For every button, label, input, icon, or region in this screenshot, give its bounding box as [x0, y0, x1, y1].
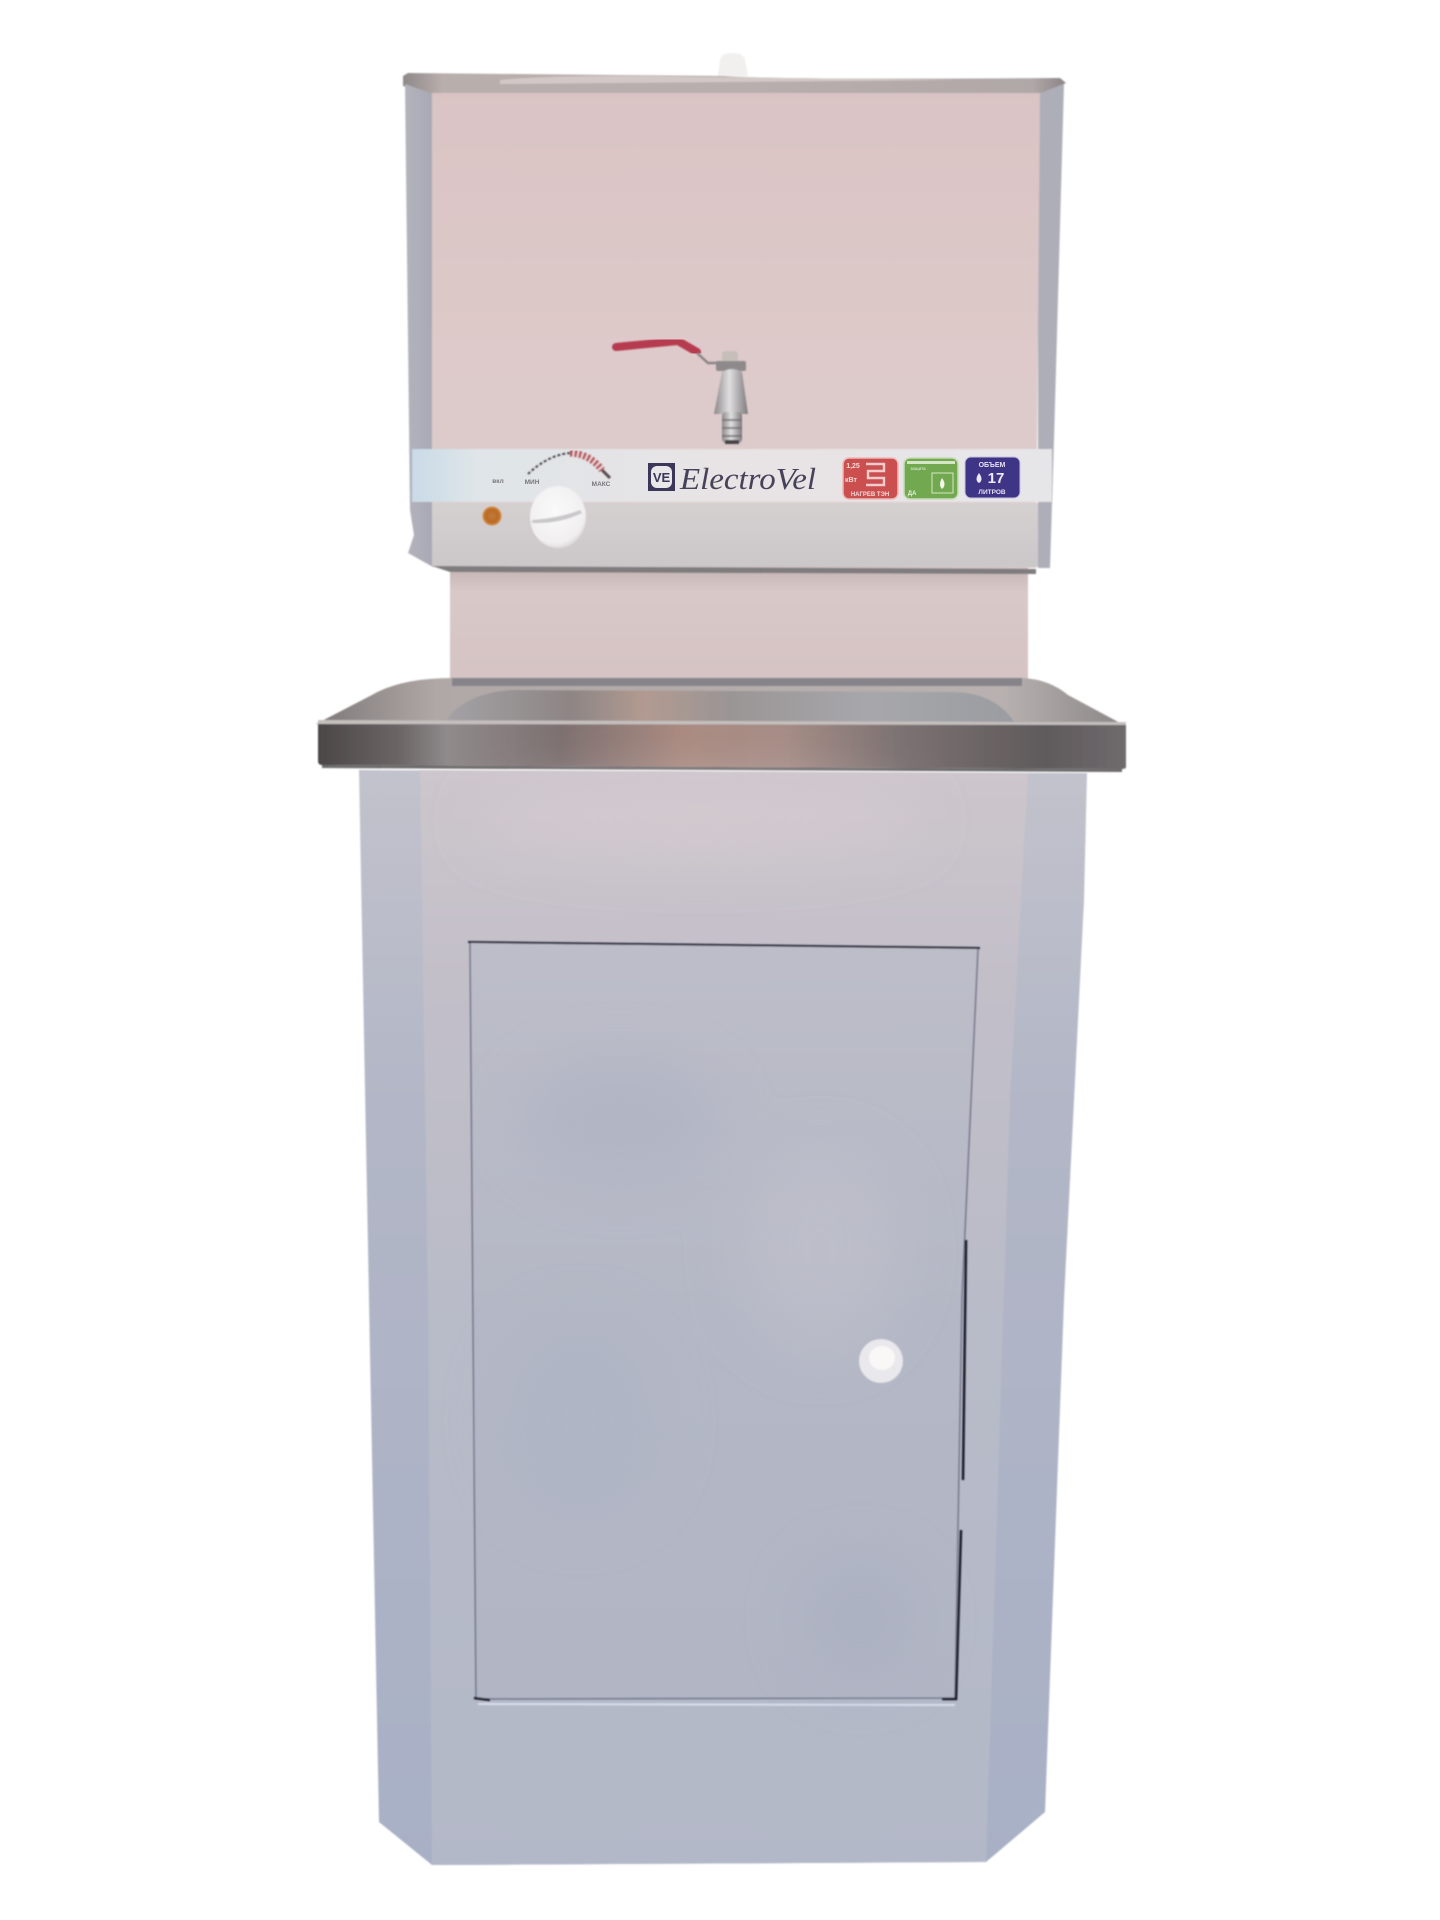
tank right side	[1038, 84, 1064, 568]
badge: safety	[904, 458, 958, 499]
rear splash panel	[450, 560, 1028, 685]
badge: volume 17 litres	[965, 457, 1020, 498]
scale labels	[492, 478, 611, 488]
sink bowl	[445, 690, 1014, 722]
door right gap	[956, 1240, 966, 1700]
indicator lamp	[482, 506, 502, 526]
door panel	[470, 942, 978, 1699]
cabinet front face	[420, 770, 1028, 1865]
red valve handle	[616, 341, 697, 352]
badge: volume 17 litres: 17	[988, 470, 1004, 487]
tap	[697, 351, 748, 444]
temperature scale arc	[528, 453, 610, 478]
brand name: ElectroVel	[679, 461, 816, 496]
badge: safety: защита	[910, 466, 926, 471]
cabinet door	[468, 942, 980, 1706]
badge: power: НАГРЕВ ТЭН	[851, 492, 889, 498]
sink	[316, 678, 1126, 772]
door top gap	[468, 942, 980, 948]
tank top lid	[403, 73, 1066, 96]
scale labels: МАКС	[592, 481, 611, 488]
scale labels: МИН	[525, 479, 540, 486]
scale labels: вкл	[492, 478, 504, 485]
sink deck	[316, 678, 1122, 724]
tank filler cap	[718, 53, 748, 76]
cabinet body	[359, 770, 1087, 1865]
badge: volume 17 litres: ОБЪЕМ	[979, 462, 1006, 469]
badge: power: 1,25	[846, 463, 860, 470]
tank left side	[405, 84, 433, 567]
control label band	[412, 449, 1052, 502]
stainless front lip	[318, 720, 1126, 769]
tank front face	[432, 93, 1040, 568]
thermostat knob	[530, 486, 586, 548]
mottled paint on cabinet	[480, 785, 920, 1680]
badge: power	[843, 458, 898, 499]
badge: safety: ДА	[908, 491, 917, 497]
brand logo	[648, 463, 675, 491]
door knob	[859, 1339, 903, 1383]
badge: volume 17 litres: ЛИТРОВ	[978, 489, 1006, 496]
badge: power: кВт	[845, 477, 858, 484]
cabinet	[359, 770, 1087, 1865]
door bottom edge highlight	[478, 1703, 955, 1706]
water tank	[403, 53, 1066, 685]
brand logo: VE	[653, 470, 670, 485]
door bottom corner gaps	[474, 1698, 957, 1700]
